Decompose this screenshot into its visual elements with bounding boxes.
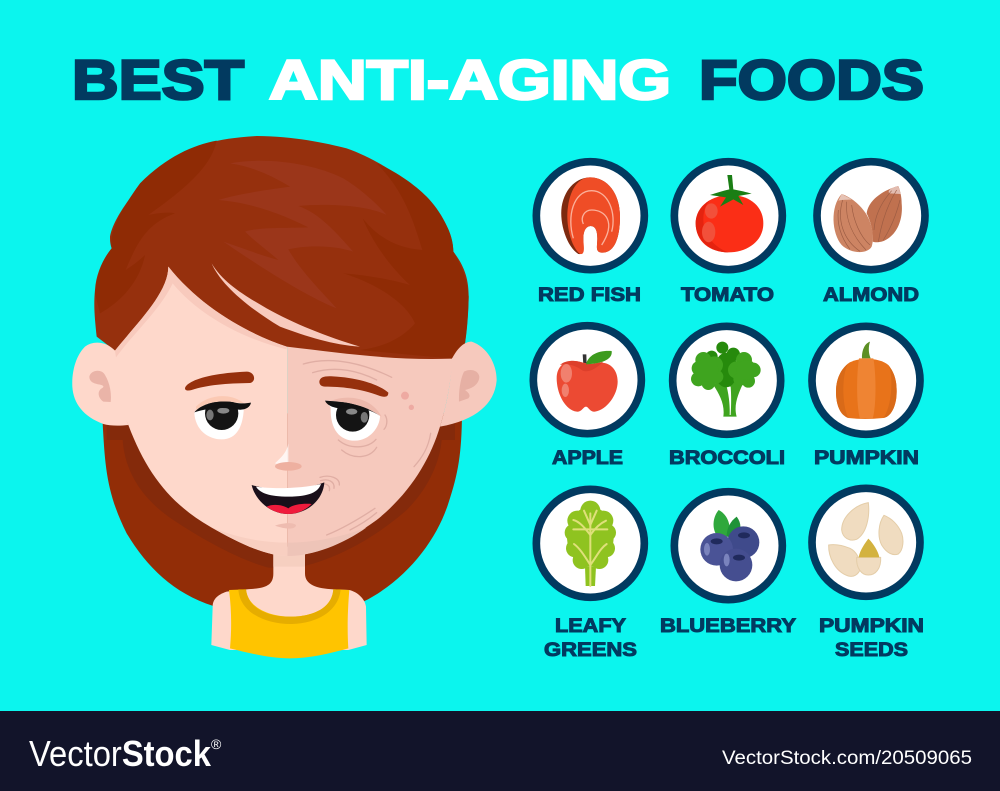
hair shadow on forehead [115,267,287,357]
food labels row 1: RED FISH [538,284,641,306]
item: tomato [674,162,782,270]
food labels row 1: ALMOND [823,284,919,306]
item: pumpkin [812,326,920,434]
yellow top [229,589,349,658]
left eye [194,396,251,439]
item: broccoli [673,326,781,434]
food labels row 1: TOMATO [681,284,774,306]
title: ANTI-AGING [269,48,671,111]
title: BEST [72,48,244,111]
food labels row 2 [552,447,919,469]
face [114,266,288,554]
food labels row 3: SEEDS [835,639,908,661]
item: apple [533,326,641,434]
item: leafy greens [536,489,644,597]
food labels row 3: LEAFY [555,615,626,637]
food row 3 [536,488,920,600]
food row 2 [533,326,920,434]
item: pumpkin seeds [812,488,920,596]
woman face illustration [72,136,497,658]
left ear [72,343,128,426]
food labels row 3 [544,615,924,661]
mouth [252,482,324,514]
nose [275,443,302,471]
title [72,48,924,111]
food labels row 3: PUMPKIN [819,615,924,637]
footer bar [0,711,1000,791]
food labels row 3: GREENS [544,639,637,661]
forehead wrinkles [303,361,392,380]
eyebrows [185,372,254,391]
footer logo: VectorStock [29,733,212,774]
item: almond [817,162,925,270]
food row 1 [536,162,925,270]
neck and shoulders [211,547,367,650]
chin mark [275,523,296,529]
footer url: VectorStock.com/20509065 [722,748,972,769]
food labels row 3: BLUEBERRY [660,615,796,637]
food labels row 2: BROCCOLI [669,447,785,469]
back hair [102,413,462,606]
registered mark: ® [211,736,222,752]
right ear [440,342,497,427]
food labels row 1 [538,284,919,306]
item: red fish [536,162,644,270]
item: blueberry [674,492,782,600]
title: FOODS [699,48,924,111]
food labels row 2: PUMPKIN [814,447,919,469]
moles [401,392,409,400]
right eye with bags [320,398,431,535]
hair top [94,136,469,359]
food labels row 2: APPLE [552,447,623,469]
